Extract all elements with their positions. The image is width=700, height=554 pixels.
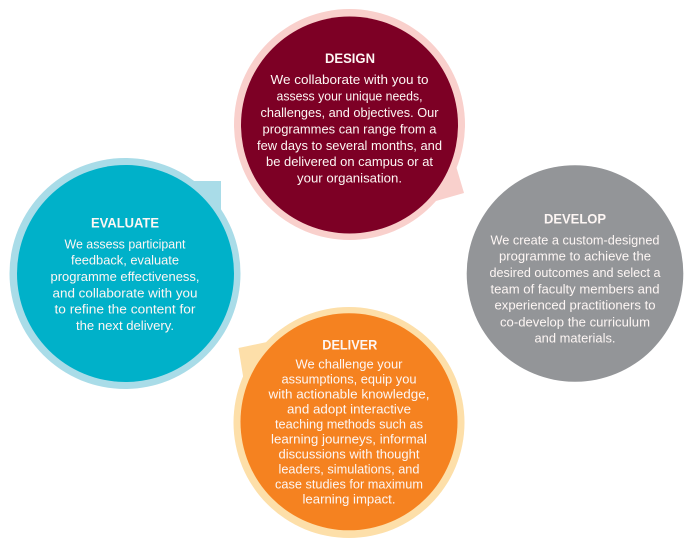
text block: develop description: co-develop the curriculum [500, 314, 650, 329]
text block: develop description: experienced practitioners to [494, 298, 656, 313]
text block: evaluate description [50, 236, 200, 333]
text block: deliver description: case studies for maximum [275, 476, 423, 491]
panel: evaluate [10, 158, 240, 389]
text block: evaluate description: We assess participant [64, 236, 186, 251]
text block: design description: be delivered on campus or at [266, 154, 433, 169]
text block: deliver description: learning journeys, informal [271, 431, 427, 446]
text block: deliver description: leaders, simulations, and [278, 461, 420, 476]
text block: deliver description: We challenge your [296, 356, 403, 371]
panel: deliver [234, 307, 464, 538]
text block: develop description [490, 232, 661, 346]
text block: develop description: and materials. [534, 331, 616, 346]
text block: deliver description: teaching methods such as [275, 416, 423, 431]
text block: evaluate description: and collaborate with you [52, 285, 198, 300]
text block: design description: challenges, and objectives. Our [260, 105, 439, 120]
panel: design [234, 9, 465, 240]
icon: design speech bubble [234, 9, 465, 240]
text block: evaluate description: feedback, evaluate [71, 253, 179, 268]
text block: deliver description: learning impact. [302, 491, 396, 506]
text block: evaluate description: to refine the content for [54, 302, 196, 317]
text block: deliver description: discussions with thought [278, 446, 420, 461]
heading: develop: DEVELOP [544, 210, 606, 226]
text block: evaluate description: the next delivery. [76, 318, 174, 333]
text block: design description: your organisation. [297, 170, 402, 186]
heading: design: DESIGN [325, 50, 375, 66]
text block: design description: few days to several months, and [257, 138, 442, 153]
text block: evaluate description: programme effectiveness, [50, 269, 200, 284]
panel: develop [467, 165, 683, 382]
text block: deliver description: with actionable knowledge, [267, 386, 430, 401]
text block: design description: We collaborate with you to [270, 72, 428, 87]
text block: design description [257, 72, 442, 186]
heading: evaluate: EVALUATE [91, 215, 159, 231]
text block: design description: programmes can range from a [262, 122, 437, 136]
text block: develop description: programme to achieve the [499, 249, 651, 264]
icon: develop circle [467, 165, 683, 382]
text block: design description: assess your unique needs, [276, 88, 422, 104]
text block: develop description: desired outcomes and select a [490, 265, 661, 280]
text block: deliver description [267, 356, 430, 506]
text block: deliver description: assumptions, equip you [282, 371, 416, 386]
icon: evaluate speech bubble [10, 158, 240, 389]
text block: develop description: team of faculty members and [490, 281, 660, 296]
icon: deliver speech bubble [234, 307, 464, 538]
text block: deliver description: and adopt interactive [287, 401, 411, 416]
heading: deliver: DELIVER [322, 336, 377, 352]
text block: develop description: We create a custom-designed [490, 232, 660, 247]
